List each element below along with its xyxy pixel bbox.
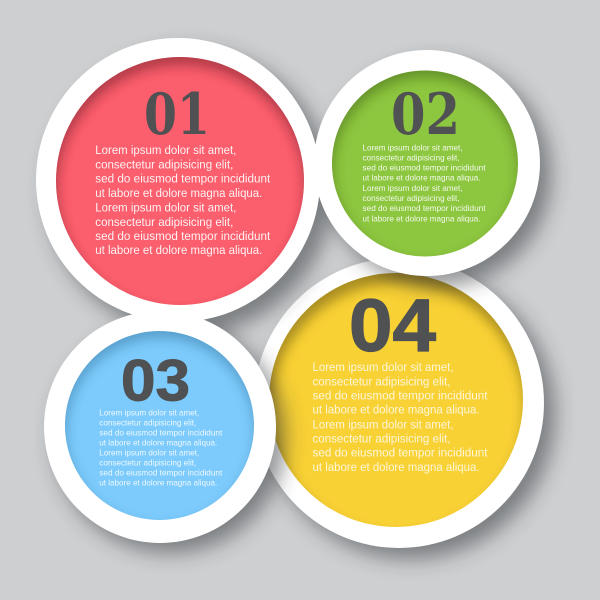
circle 03 body text: ut labore et dolore magna aliqua. [99, 478, 217, 488]
circle 03 body text: ut labore et dolore magna aliqua. [99, 437, 217, 447]
circle 02 inner shadow [332, 70, 518, 250]
circle 04 body text: consectetur adipisicing elit, [312, 374, 450, 388]
circle 03 body text: sed do eiusmod tempor incididunt [99, 468, 223, 478]
circle 02 body text: Lorem ipsum dolor sit amet, [362, 143, 462, 153]
circle 03 colour disc [65, 331, 254, 520]
circle 01 colour disc [56, 57, 304, 305]
circle 04 body text: sed do eiusmod tempor incididunt [312, 388, 488, 402]
circle 04 body text: ut labore et dolore magna aliqua. [312, 460, 480, 474]
circle 01 body text: ut labore et dolore magna aliqua. [95, 243, 262, 257]
circle 02 body text: ut labore et dolore magna aliqua. [362, 173, 480, 183]
circle 01 body text: sed do eiusmod tempor incididunt [95, 172, 271, 186]
circle 01 body text: sed do eiusmod tempor incididunt [95, 229, 271, 243]
circle 02 white ring [314, 50, 540, 276]
circle 02 body text: ut labore et dolore magna aliqua. [362, 213, 480, 223]
circle 04 body text [312, 360, 488, 474]
circle 01 body text: Lorem ipsum dolor sit amet, [95, 143, 236, 157]
circle 01 body text: ut labore et dolore magna aliqua. [95, 186, 262, 200]
circle 01 white ring [36, 38, 320, 322]
circle 04 body text: ut labore et dolore magna aliqua. [312, 403, 480, 417]
circle 03 inner shadow [65, 331, 254, 510]
circle 04 body text: Lorem ipsum dolor sit amet, [312, 417, 454, 431]
circle 01 body text: consectetur adipisicing elit, [95, 215, 233, 229]
circle 03 body text: consectetur adipisicing elit, [99, 417, 196, 427]
number 02: 02 [391, 81, 460, 148]
circle 04 inner shadow [270, 273, 523, 506]
circle 01 red panel [36, 38, 319, 320]
circle 02 green panel [316, 50, 540, 276]
circle 03 body text: consectetur adipisicing elit, [99, 458, 196, 468]
circle 03 white ring [44, 311, 276, 543]
circle 02 body text: consectetur adipisicing elit, [362, 153, 460, 163]
circle 03 body text: sed do eiusmod tempor incididunt [99, 427, 223, 437]
circle 04 colour disc [269, 273, 523, 527]
circle 02 body text: consectetur adipisicing elit, [362, 193, 460, 203]
number 01: 01 [144, 81, 210, 148]
circle 02 body text [362, 143, 486, 223]
circle 02 body text: sed do eiusmod tempor incididunt [362, 163, 486, 173]
circle 01 body text: Lorem ipsum dolor sit amet, [95, 200, 236, 214]
circle 03 body text: Lorem ipsum dolor sit amet, [99, 448, 199, 458]
circle 03 body text: Lorem ipsum dolor sit amet, [99, 408, 199, 418]
number 04: 04 [349, 284, 436, 367]
circle 03 blue panel [44, 314, 276, 543]
circle 04 body text: Lorem ipsum dolor sit amet, [312, 360, 454, 374]
circle 03 body text [99, 408, 223, 488]
circle 04 white ring [254, 258, 544, 548]
circle 01 body text: consectetur adipisicing elit, [95, 158, 233, 172]
circle 02 body text: Lorem ipsum dolor sit amet, [362, 183, 462, 193]
circle 01 inner shadow [56, 57, 304, 296]
circle 04 body text: consectetur adipisicing elit, [312, 432, 450, 446]
circle 04 yellow panel [259, 261, 568, 572]
drop shadows of upper circles [48, 50, 551, 553]
circle 04 body text: sed do eiusmod tempor incididunt [312, 446, 488, 460]
circle 04 drop shadow [265, 269, 555, 559]
number 03: 03 [121, 348, 190, 414]
circle 01 body text [95, 143, 271, 257]
circle 02 body text: sed do eiusmod tempor incididunt [362, 203, 486, 213]
circle 02 colour disc [332, 70, 518, 256]
